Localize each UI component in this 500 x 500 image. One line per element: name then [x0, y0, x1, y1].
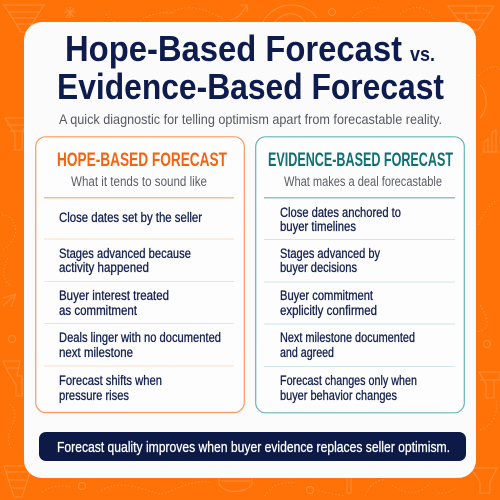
hope item 3: as commitment: [59, 303, 137, 318]
panel: evidence-based forecast: [256, 137, 464, 413]
evidence divider: [264, 197, 455, 198]
subtitle: A quick diagnostic for telling optimism apart from forecastable reality.: [59, 111, 442, 127]
hope item 5: Forecast shifts when: [59, 373, 162, 388]
evidence subheading: What makes a deal forecastable: [284, 174, 442, 189]
evidence item 1: Close dates anchored to: [280, 205, 401, 220]
panel: hope-based forecast: [36, 137, 244, 413]
hope divider: [44, 197, 234, 198]
evidence item 5: Forecast changes only when: [280, 373, 417, 388]
hope item 2: activity happened: [59, 260, 149, 275]
evidence item 5: buyer behavior changes: [280, 388, 397, 403]
hope item 5: pressure rises: [59, 388, 129, 403]
title: Evidence-Based Forecast: [57, 66, 444, 107]
hope item 4: Deals linger with no documented: [59, 330, 221, 345]
evidence item 2: buyer decisions: [280, 260, 357, 275]
hope item 4: next milestone: [59, 345, 133, 360]
hope item 1: Close dates set by the seller: [59, 210, 202, 225]
hope item 2: Stages advanced because: [59, 246, 191, 261]
callout banner: [39, 432, 466, 461]
evidence item 2: Stages advanced by: [280, 246, 380, 261]
evidence item 4: Next milestone documented: [280, 330, 415, 345]
hope subheading: What it tends to sound like: [71, 174, 207, 189]
hope item 3: Buyer interest treated: [59, 288, 169, 303]
hope heading: HOPE-BASED FORECAST: [57, 150, 227, 171]
evidence item 1: buyer timelines: [280, 219, 356, 234]
evidence item 4: and agreed: [280, 345, 334, 360]
evidence item 3: explicitly confirmed: [280, 303, 377, 318]
title: [57, 28, 444, 107]
evidence item 3: Buyer commitment: [280, 288, 373, 303]
title: vs.: [410, 44, 435, 66]
title: Hope-Based Forecast: [65, 28, 402, 69]
